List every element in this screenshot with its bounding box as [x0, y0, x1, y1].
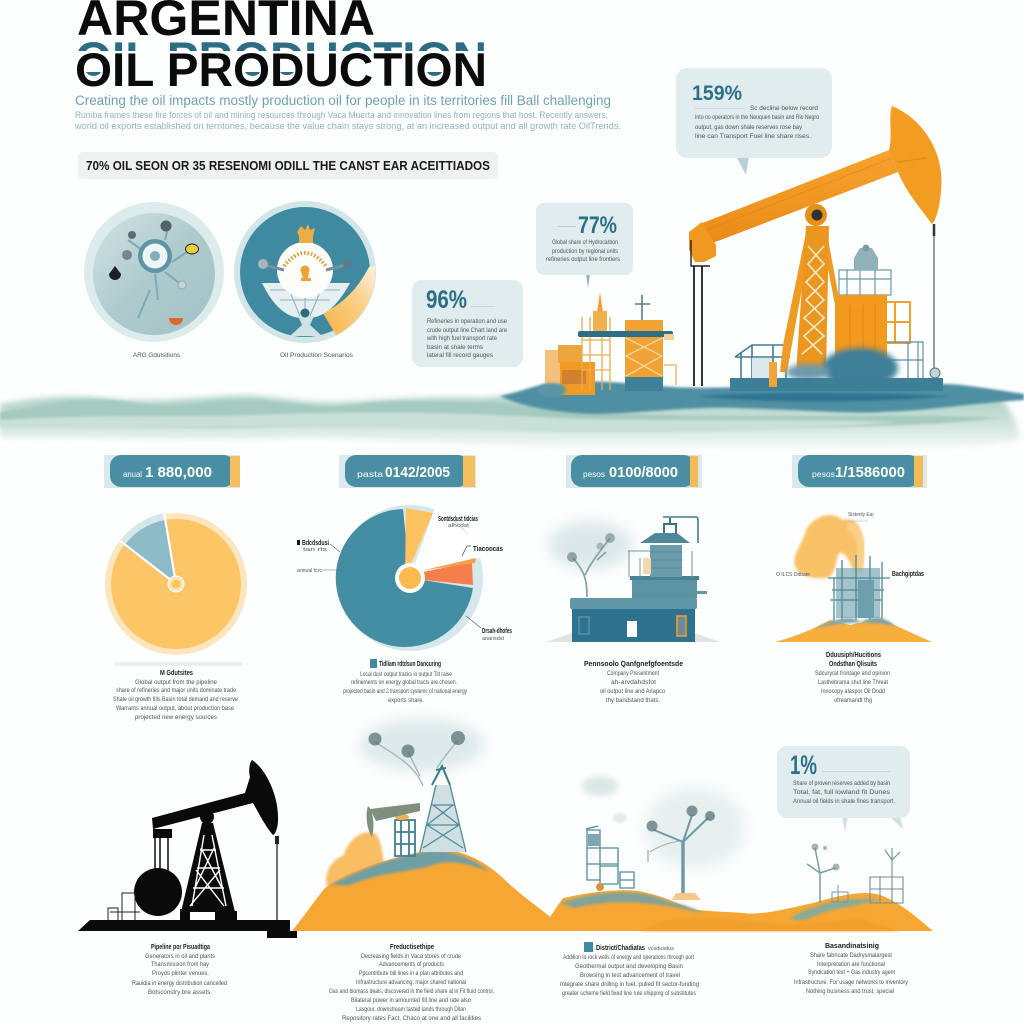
pie chart 2 — [297, 505, 512, 651]
text block hill 1: Bilateral power in amounted fill line and rate also — [351, 997, 471, 1004]
icon: building with tree — [546, 517, 720, 642]
small tower — [395, 820, 415, 856]
icon: crown — [297, 224, 315, 243]
title — [76, 0, 484, 86]
icon: node medium — [122, 250, 132, 260]
icon: teal square — [584, 942, 593, 952]
pie label bottom right: Drsah-dhofes — [482, 626, 512, 635]
divider pie 1 — [115, 662, 242, 666]
icon: node yellow — [186, 244, 198, 254]
callout 77%: production by regional units — [552, 248, 619, 255]
lantern top — [854, 248, 878, 270]
text block pie 1: share of refineries and major units dominate trade — [116, 687, 236, 694]
landscape wash — [0, 381, 1024, 448]
text block silhouette: Generators in oil and plants — [145, 953, 216, 960]
tower — [780, 228, 811, 372]
beam — [700, 150, 898, 244]
header bar 4: 1/1586000 — [835, 464, 905, 481]
hills — [292, 849, 933, 931]
rear equipment — [839, 270, 891, 295]
refinery labels — [776, 512, 924, 578]
text block hill 3: Syndication text + Gas industry agent — [808, 969, 895, 976]
callout 96%: lateral fill record gauges — [427, 352, 494, 359]
header bar 4 — [792, 455, 927, 488]
text block pie 2 — [343, 659, 468, 704]
text block silhouette: Botsconstry bre assets. — [148, 989, 212, 996]
header bar 4: pesos — [812, 470, 835, 479]
mini pump beam — [370, 803, 420, 821]
small refinery — [538, 292, 676, 397]
text block hill 1 — [329, 942, 494, 1022]
text block hill 1: Gas and biomass deals, discovered in the field share at in Fit fluid control, — [329, 988, 494, 995]
text block silhouette: Thansmission from hay — [151, 961, 210, 968]
text block pie 1 — [113, 668, 238, 721]
text block hill 2: District/Chadiatas — [596, 943, 645, 952]
text block hill 3: Basandinatsinig — [825, 941, 879, 950]
text block refinery: Sdcuryrat frontage and opinion — [815, 670, 890, 677]
header bar 1 — [104, 455, 240, 488]
window white — [627, 621, 637, 637]
text block silhouette: Pipeline por Pisuadtiga — [151, 942, 211, 951]
callout 77% — [536, 203, 633, 288]
text block hill 1: Repository rates Fact, Chaco at one and all facilities — [342, 1015, 482, 1022]
pie label left: Bdcdsdusi — [302, 538, 329, 547]
text block refinery: Ondsthan Qlisuits — [829, 659, 877, 668]
icon: refinery with smoke — [775, 512, 932, 642]
text block refinery: Lasthebrama shut line Threat — [818, 679, 888, 686]
text block hill 3 — [794, 941, 909, 995]
callout 1%: Share of proven reserves added by basin — [793, 780, 890, 787]
pie label top right: alhcdst — [448, 523, 470, 529]
text block hill 1: Infrastructure advancing, major shared national — [356, 979, 466, 986]
text block building: Pennsoolo Qanfgnefgfoentsde — [584, 659, 683, 668]
text block silhouette — [132, 942, 227, 996]
text block hill 2: vcsdusdus — [648, 946, 674, 952]
header bar 3: pesos — [583, 470, 605, 479]
text block pie 2: refinements on energy global tracts are chosen. — [351, 679, 457, 686]
scaffold — [887, 302, 910, 343]
callout 159%: 159% — [692, 82, 742, 105]
callout 1%: 1% — [790, 750, 817, 780]
icon: node orange — [169, 318, 183, 325]
callout 159% — [676, 68, 832, 175]
text block silhouette: Rauidia in energy distribution cancelled — [132, 980, 227, 987]
rods — [694, 266, 702, 386]
pumpjack orange — [689, 106, 943, 391]
trees — [375, 740, 458, 786]
text block hill 1: Decreasing fields in Vaca stores of crude — [361, 953, 461, 960]
circle diagram: refinery emblem — [234, 201, 376, 343]
callout 159%: output, gas down shale reserves rose bay — [695, 124, 803, 131]
header bar 2: 0142/2005 — [385, 464, 450, 481]
icon: node small — [128, 231, 136, 239]
callout 96%: 96% — [426, 286, 467, 314]
callout 77%: Global share of Hydrocarbon — [552, 239, 618, 246]
tree small right — [807, 848, 835, 903]
tree field — [654, 815, 708, 893]
text block pie 2: projected basin and 2 transport systems of national energy — [343, 688, 468, 695]
callout 159%: line can Transport Fuel line share rises. — [695, 133, 811, 140]
text block hill 3: Nothing business and trust, special — [806, 988, 894, 995]
text block pie 1: M Gdutsites — [160, 668, 193, 677]
text block pie 1: Shale oil growth fills Basin total demand and reserve — [113, 696, 238, 703]
callout 96%: basin at shale terms — [427, 344, 484, 351]
rig right — [870, 848, 903, 903]
text block pie 1: Warrants annual output, about production base — [116, 705, 234, 712]
callout 77%: 77% — [578, 212, 617, 239]
callout 159%: Sc decline below record — [750, 105, 818, 112]
pie chart 1 — [105, 512, 247, 655]
icon: node black — [109, 266, 121, 280]
callout 1% — [777, 746, 910, 832]
text block pie 2: Tidliam rdtdsun Dancuring — [379, 659, 441, 668]
circle caption left: ARG Gdutsitions — [133, 352, 181, 359]
text block pie 2: exports share. — [388, 697, 424, 704]
text block building: thy bandstand thats. — [606, 697, 660, 704]
icon: node pale — [178, 281, 186, 289]
horsehead — [889, 106, 942, 224]
teal smudge — [822, 348, 898, 388]
text block refinery: Dduusiph/Hucitions — [826, 650, 881, 659]
rig field left — [586, 826, 634, 888]
callout 96%: crude output line Chart land are — [427, 327, 507, 334]
icon: figure — [300, 265, 311, 281]
callout 1%: Annual oil fields in shale fines transport. — [793, 798, 895, 805]
orange post — [769, 362, 777, 387]
plant fence left — [735, 345, 790, 378]
intro text: Creating the oil impacts mostly production oil for people in its territories fill Ball challenging — [75, 93, 611, 108]
header bar 1: 1 880,000 — [145, 464, 212, 481]
text block hill 3: Interpretation are functional — [817, 961, 885, 968]
callout 1%: Total, fat, full lowland fit Dunes — [793, 789, 891, 796]
text block building: ah-arvdahdsfot — [611, 679, 656, 686]
pie label right — [462, 544, 503, 556]
refinery labels: O ILCS Ddbate — [776, 572, 810, 578]
text block hill 3: Share fabricate Dadrysmalargest — [810, 952, 892, 959]
callout 96%: with high fuel transport rate — [426, 335, 497, 342]
text block building: oil output line and Ariapco — [600, 688, 665, 695]
pie label left: tan rts — [303, 547, 327, 553]
tree — [573, 538, 610, 597]
pivot — [805, 204, 827, 226]
text block refinery — [815, 650, 890, 704]
pie label top right — [438, 514, 478, 529]
header bar 2 — [339, 455, 476, 488]
text block pie 1: Global output from the pipeline — [135, 679, 217, 686]
pie label bottom right — [466, 616, 512, 642]
text block hill 1: Lasgour, downstream tasted lands through Dilan — [356, 1006, 466, 1013]
text block refinery: ofreamandt thg — [834, 697, 872, 704]
header bar 3: 0100/8000 — [609, 464, 678, 481]
callout 159%: Into no operators in the Neuquen basin and Rio Negro — [695, 114, 819, 121]
pie label top right: Sontdsdust tidcias — [438, 514, 478, 523]
icon: node grey — [160, 220, 172, 232]
orange cloud — [326, 832, 388, 892]
text block building — [584, 659, 683, 704]
text block hill 1: Ppcontribute bill lines in a plan attributes and — [359, 970, 463, 977]
circle caption right: Oil Production Scenarios — [280, 352, 354, 359]
orange hills and oil field — [292, 719, 933, 931]
intro text: world oil exports established on territories, because the value chain stays strong, at an increased output and all growth rate OilTrends. — [74, 121, 621, 132]
left head — [689, 222, 716, 262]
text block hill 2: Browsing in test advancement of travel — [580, 972, 680, 979]
pie label right: Tiacoocas — [473, 544, 503, 553]
title: OIL PRODUCTION — [75, 43, 487, 96]
text block hill 3: Infrastructure. For usage networks to Inventory — [794, 979, 909, 986]
callout 96% — [412, 280, 523, 367]
header bar 2: pasta — [357, 470, 384, 479]
callout 77%: refineries output line frontiers — [546, 256, 621, 263]
pedestal — [290, 316, 322, 336]
text block hill 1: Freductisethipe — [390, 942, 434, 951]
text block hill 2: Integrate share drilling in fuel, pulled fit sector-funding — [560, 981, 699, 988]
building — [835, 295, 887, 367]
intro text: Rumba frames these fire forces of oil and mining resources through Vaca Muerta and innovation lines from regions that host. Recently answers, — [75, 110, 608, 121]
text block silhouette: Proyds plinter venues. — [152, 970, 209, 977]
text block building: Company Presentment — [607, 670, 659, 677]
mist behind trees — [360, 719, 484, 771]
subtitle pill: 70% OIL SEON OR 35 RESENOMI ODILL THE CANST EAR ACEITTIADOS — [86, 159, 490, 173]
text block refinery: Innocopy alaspor Oil Dodd — [821, 688, 885, 695]
refinery labels: Bachgiptdas — [892, 569, 924, 578]
pie label bottom right: anansdst — [482, 636, 504, 642]
circle diagram: network — [84, 202, 224, 342]
derrick — [420, 766, 466, 852]
text block hill 1: Advancements of products — [379, 961, 445, 968]
intro text — [74, 93, 621, 132]
callout 96%: Refineries in operation and use — [427, 318, 507, 325]
window orange — [677, 616, 686, 636]
text block pie 1: projected new energy sources — [135, 714, 218, 721]
pie label left — [297, 538, 342, 574]
refinery labels: Sistenly Ear — [848, 512, 874, 518]
text block hill 2: greater scheme field fixed line rule shipping of substitutes — [562, 990, 697, 997]
text block hill 2 — [560, 942, 699, 997]
text block hill 2: Geothermal output and developing Basin — [575, 963, 683, 970]
pie label left: annual tcrc — [297, 568, 322, 574]
header bar 3 — [566, 455, 702, 488]
rope — [933, 224, 935, 372]
text block pie 2: Local dust output tracks in output Tilt raise — [360, 671, 452, 678]
header bar 1: anual — [123, 470, 142, 479]
title: OIL PRODUCTION — [75, 32, 487, 85]
pumpjack silhouette — [78, 760, 297, 938]
text block hill 2: Addition to rock wells of energy and operations through port — [563, 954, 694, 961]
subtitle pill — [78, 152, 498, 179]
